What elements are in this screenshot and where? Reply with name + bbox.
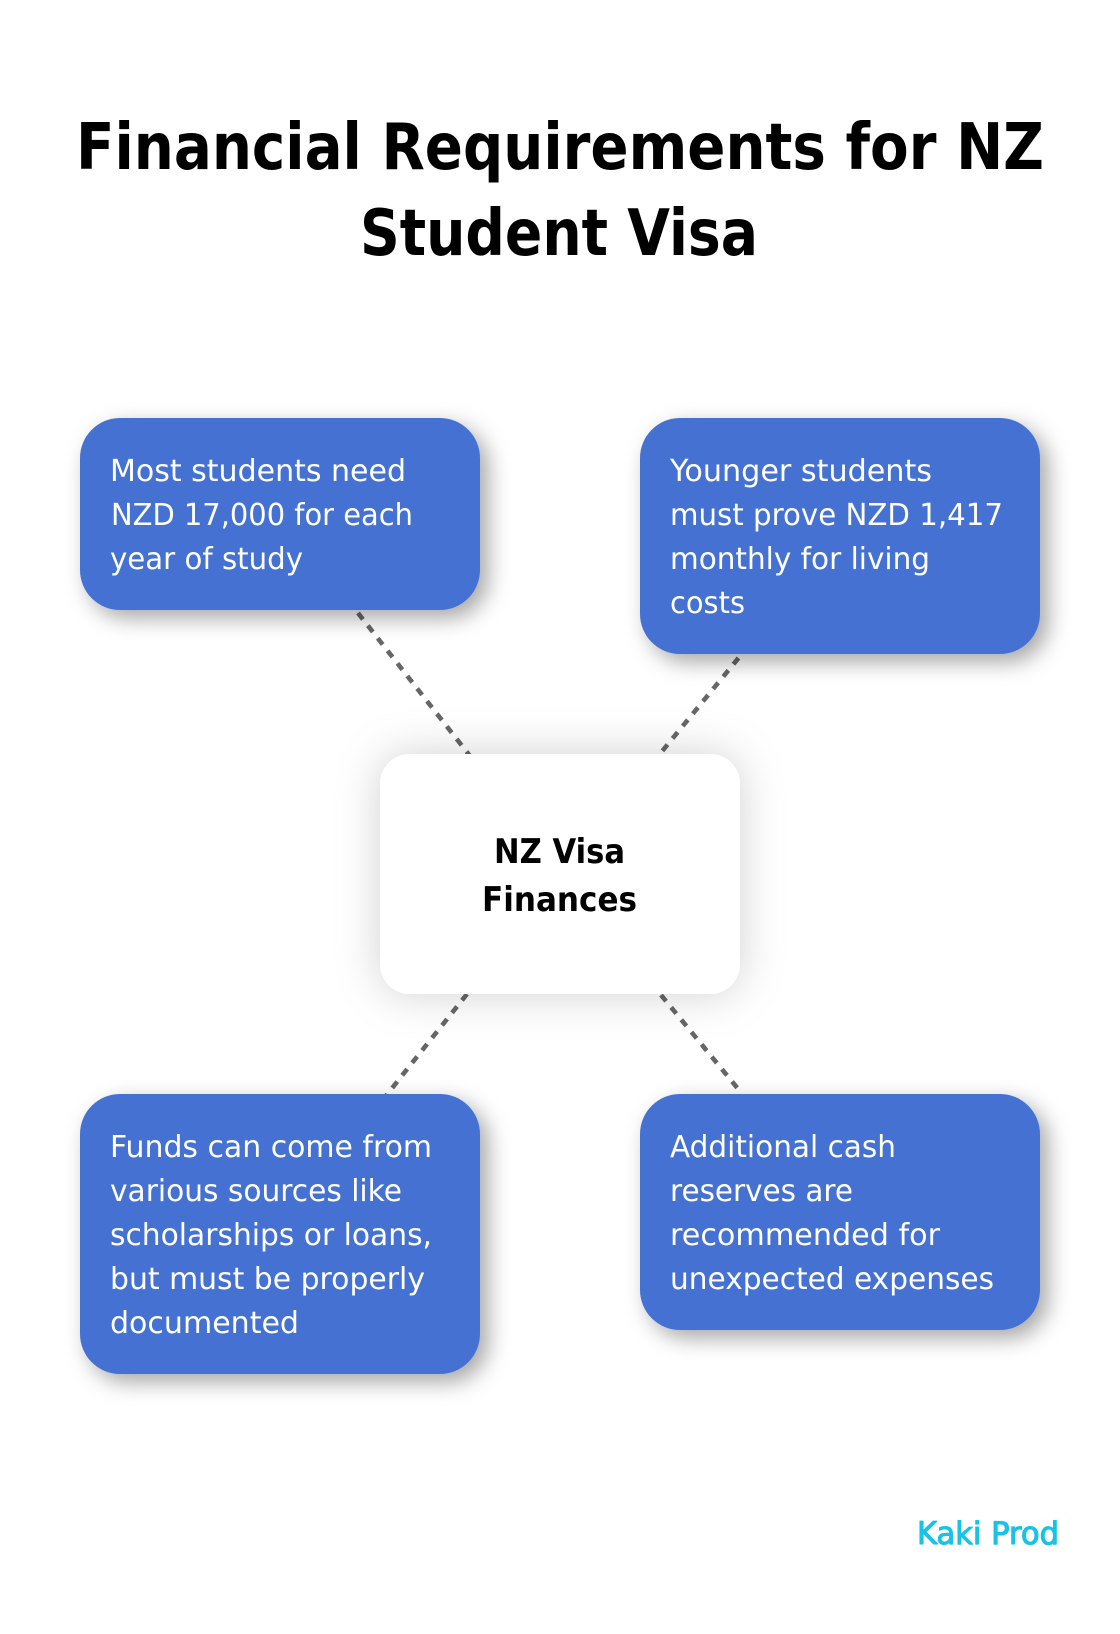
title bbox=[76, 111, 1044, 271]
text: annual funds: year of study bbox=[110, 542, 303, 577]
logo: Kaki Prod: Kaki Prod bbox=[917, 1516, 1059, 1552]
text: monthly living costs: monthly for living bbox=[670, 542, 930, 577]
text: reserves: reserves are bbox=[670, 1174, 853, 1209]
centre label bbox=[482, 832, 637, 920]
text: annual funds: NZD 17,000 for each bbox=[111, 498, 413, 533]
text: sources: documented bbox=[110, 1306, 299, 1341]
panel: cash reserves bbox=[640, 1094, 1040, 1330]
text: monthly living costs bbox=[669, 454, 1003, 621]
text: sources: scholarships or loans, bbox=[110, 1218, 432, 1253]
text: monthly living costs: costs bbox=[670, 586, 745, 621]
text: sources: Funds can come from bbox=[110, 1130, 432, 1165]
text: annual funds bbox=[110, 454, 413, 577]
text: reserves: unexpected expenses bbox=[670, 1262, 994, 1297]
text: sources: various sources like bbox=[110, 1174, 402, 1209]
panel: younger students bbox=[640, 418, 1040, 654]
panel: NZD 17,000 per year bbox=[80, 418, 480, 610]
text: monthly living costs: Younger students bbox=[669, 454, 932, 489]
panel: centre node bbox=[380, 754, 740, 994]
text: annual funds: Most students need bbox=[110, 454, 406, 489]
text: reserves: Additional cash bbox=[670, 1130, 896, 1165]
text: sources bbox=[110, 1130, 432, 1341]
dashed connectors bbox=[358, 613, 739, 1097]
text: reserves: recommended for bbox=[670, 1218, 941, 1253]
panel: sources of funds bbox=[80, 1094, 480, 1374]
text: sources: but must be properly bbox=[110, 1262, 425, 1297]
centre label: Finances bbox=[482, 880, 637, 920]
text: monthly living costs: must prove NZD 1,417 bbox=[670, 498, 1003, 533]
title: Student Visa bbox=[360, 197, 758, 271]
text: reserves bbox=[670, 1130, 994, 1297]
centre label: NZ Visa bbox=[494, 832, 625, 872]
